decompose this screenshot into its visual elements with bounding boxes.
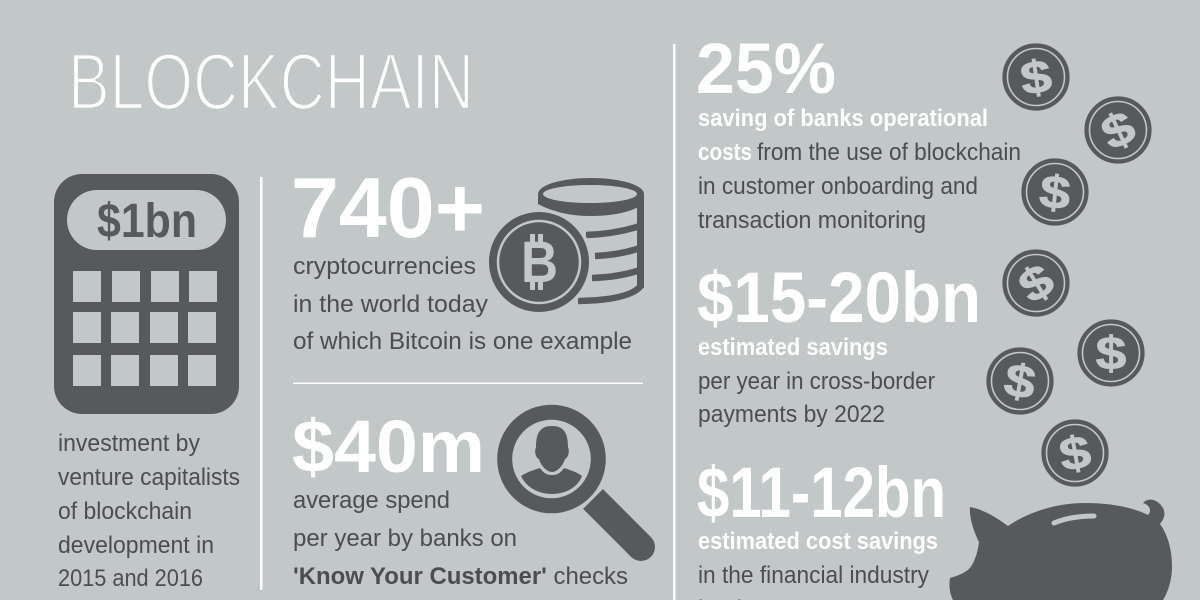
stat: $40m: $40m bbox=[292, 405, 485, 488]
icon: calculator: $1bn bbox=[97, 195, 197, 248]
text: investment description: venture capitalists bbox=[58, 464, 240, 491]
icon: coin 2 bbox=[1084, 96, 1152, 164]
icon: coin 3 bbox=[1021, 158, 1089, 226]
text: investment description bbox=[58, 430, 240, 592]
text: investment description: 2015 and 2016 bbox=[58, 565, 203, 592]
panel: KYC spend bbox=[292, 405, 655, 590]
icon: coin 1: $ bbox=[1017, 49, 1055, 105]
text: KYC description: 'Know Your Customer' checks bbox=[293, 563, 628, 590]
icon: calculator bbox=[54, 174, 239, 414]
icon: coin 6 bbox=[986, 347, 1054, 415]
panel: operational savings bbox=[696, 30, 1021, 234]
text: financial industry description: in the financial industry bbox=[698, 562, 929, 589]
icons: falling dollar coins bbox=[986, 43, 1152, 487]
stat: 740+: 740+ bbox=[291, 161, 485, 256]
text: investment description: development in bbox=[58, 532, 214, 559]
icon: bitcoin and coin stack: B bbox=[521, 230, 558, 295]
text: financial industry description: estimated cost savings bbox=[698, 528, 938, 555]
panel: cross-border savings bbox=[697, 259, 981, 428]
text: investment description: investment by bbox=[58, 430, 200, 457]
icon: coin 2: $ bbox=[1093, 100, 1143, 160]
icon: coin 7: $ bbox=[1055, 425, 1095, 481]
text: cross-border description: per year in cross-border bbox=[698, 368, 935, 395]
panel: financial industry savings bbox=[697, 454, 946, 600]
text: KYC description bbox=[293, 487, 628, 590]
text: investment description: of blockchain bbox=[58, 498, 192, 525]
stat: $11-12bn: $11-12bn bbox=[697, 454, 946, 533]
title: BLOCKCHAIN bbox=[68, 37, 474, 126]
text: operational savings description: transaction monitoring bbox=[698, 207, 926, 234]
text: operational savings description bbox=[698, 105, 1021, 234]
icon: bitcoin and coin stack bbox=[486, 178, 644, 316]
text: KYC description: per year by banks on bbox=[293, 525, 517, 552]
text: cross-border description: payments by 2022 bbox=[698, 401, 885, 428]
icon: coin 7 bbox=[1041, 419, 1109, 487]
text: operational savings description: saving of banks operational bbox=[698, 105, 988, 132]
icon: coin 3: $ bbox=[1037, 165, 1073, 219]
panel: cryptocurrencies bbox=[291, 161, 644, 355]
text: cryptocurrencies description: in the world today bbox=[293, 291, 488, 318]
icon: coin 4 bbox=[1002, 249, 1070, 317]
icon: piggy bank bbox=[949, 500, 1172, 600]
text: financial industry description bbox=[698, 528, 938, 600]
icon: coin 5 bbox=[1077, 319, 1145, 387]
icon: coin 4: $ bbox=[1009, 253, 1063, 313]
text: cross-border description bbox=[698, 334, 935, 428]
icon: coin 1 bbox=[1002, 43, 1070, 111]
icon: coin 6: $ bbox=[1000, 353, 1040, 409]
text: cross-border description: estimated savings bbox=[698, 334, 888, 361]
text: cryptocurrencies description: cryptocurrencies bbox=[293, 253, 476, 280]
stat: 25%: 25% bbox=[696, 30, 836, 109]
text: operational savings description: in customer onboarding and bbox=[698, 173, 978, 200]
text: operational savings description: costs bbox=[698, 139, 752, 166]
text: cryptocurrencies description: of which Bitcoin is one example bbox=[293, 328, 632, 355]
panel: venture capital investment bbox=[54, 174, 240, 592]
text: cryptocurrencies description bbox=[293, 253, 632, 355]
icon: magnifying glass with person bbox=[505, 412, 655, 561]
text: operational savings description: from the use of blockchain bbox=[757, 139, 1021, 166]
stat: $15-20bn: $15-20bn bbox=[697, 259, 981, 338]
icon: coin 5: $ bbox=[1096, 327, 1126, 379]
text: KYC description: average spend bbox=[293, 487, 450, 514]
